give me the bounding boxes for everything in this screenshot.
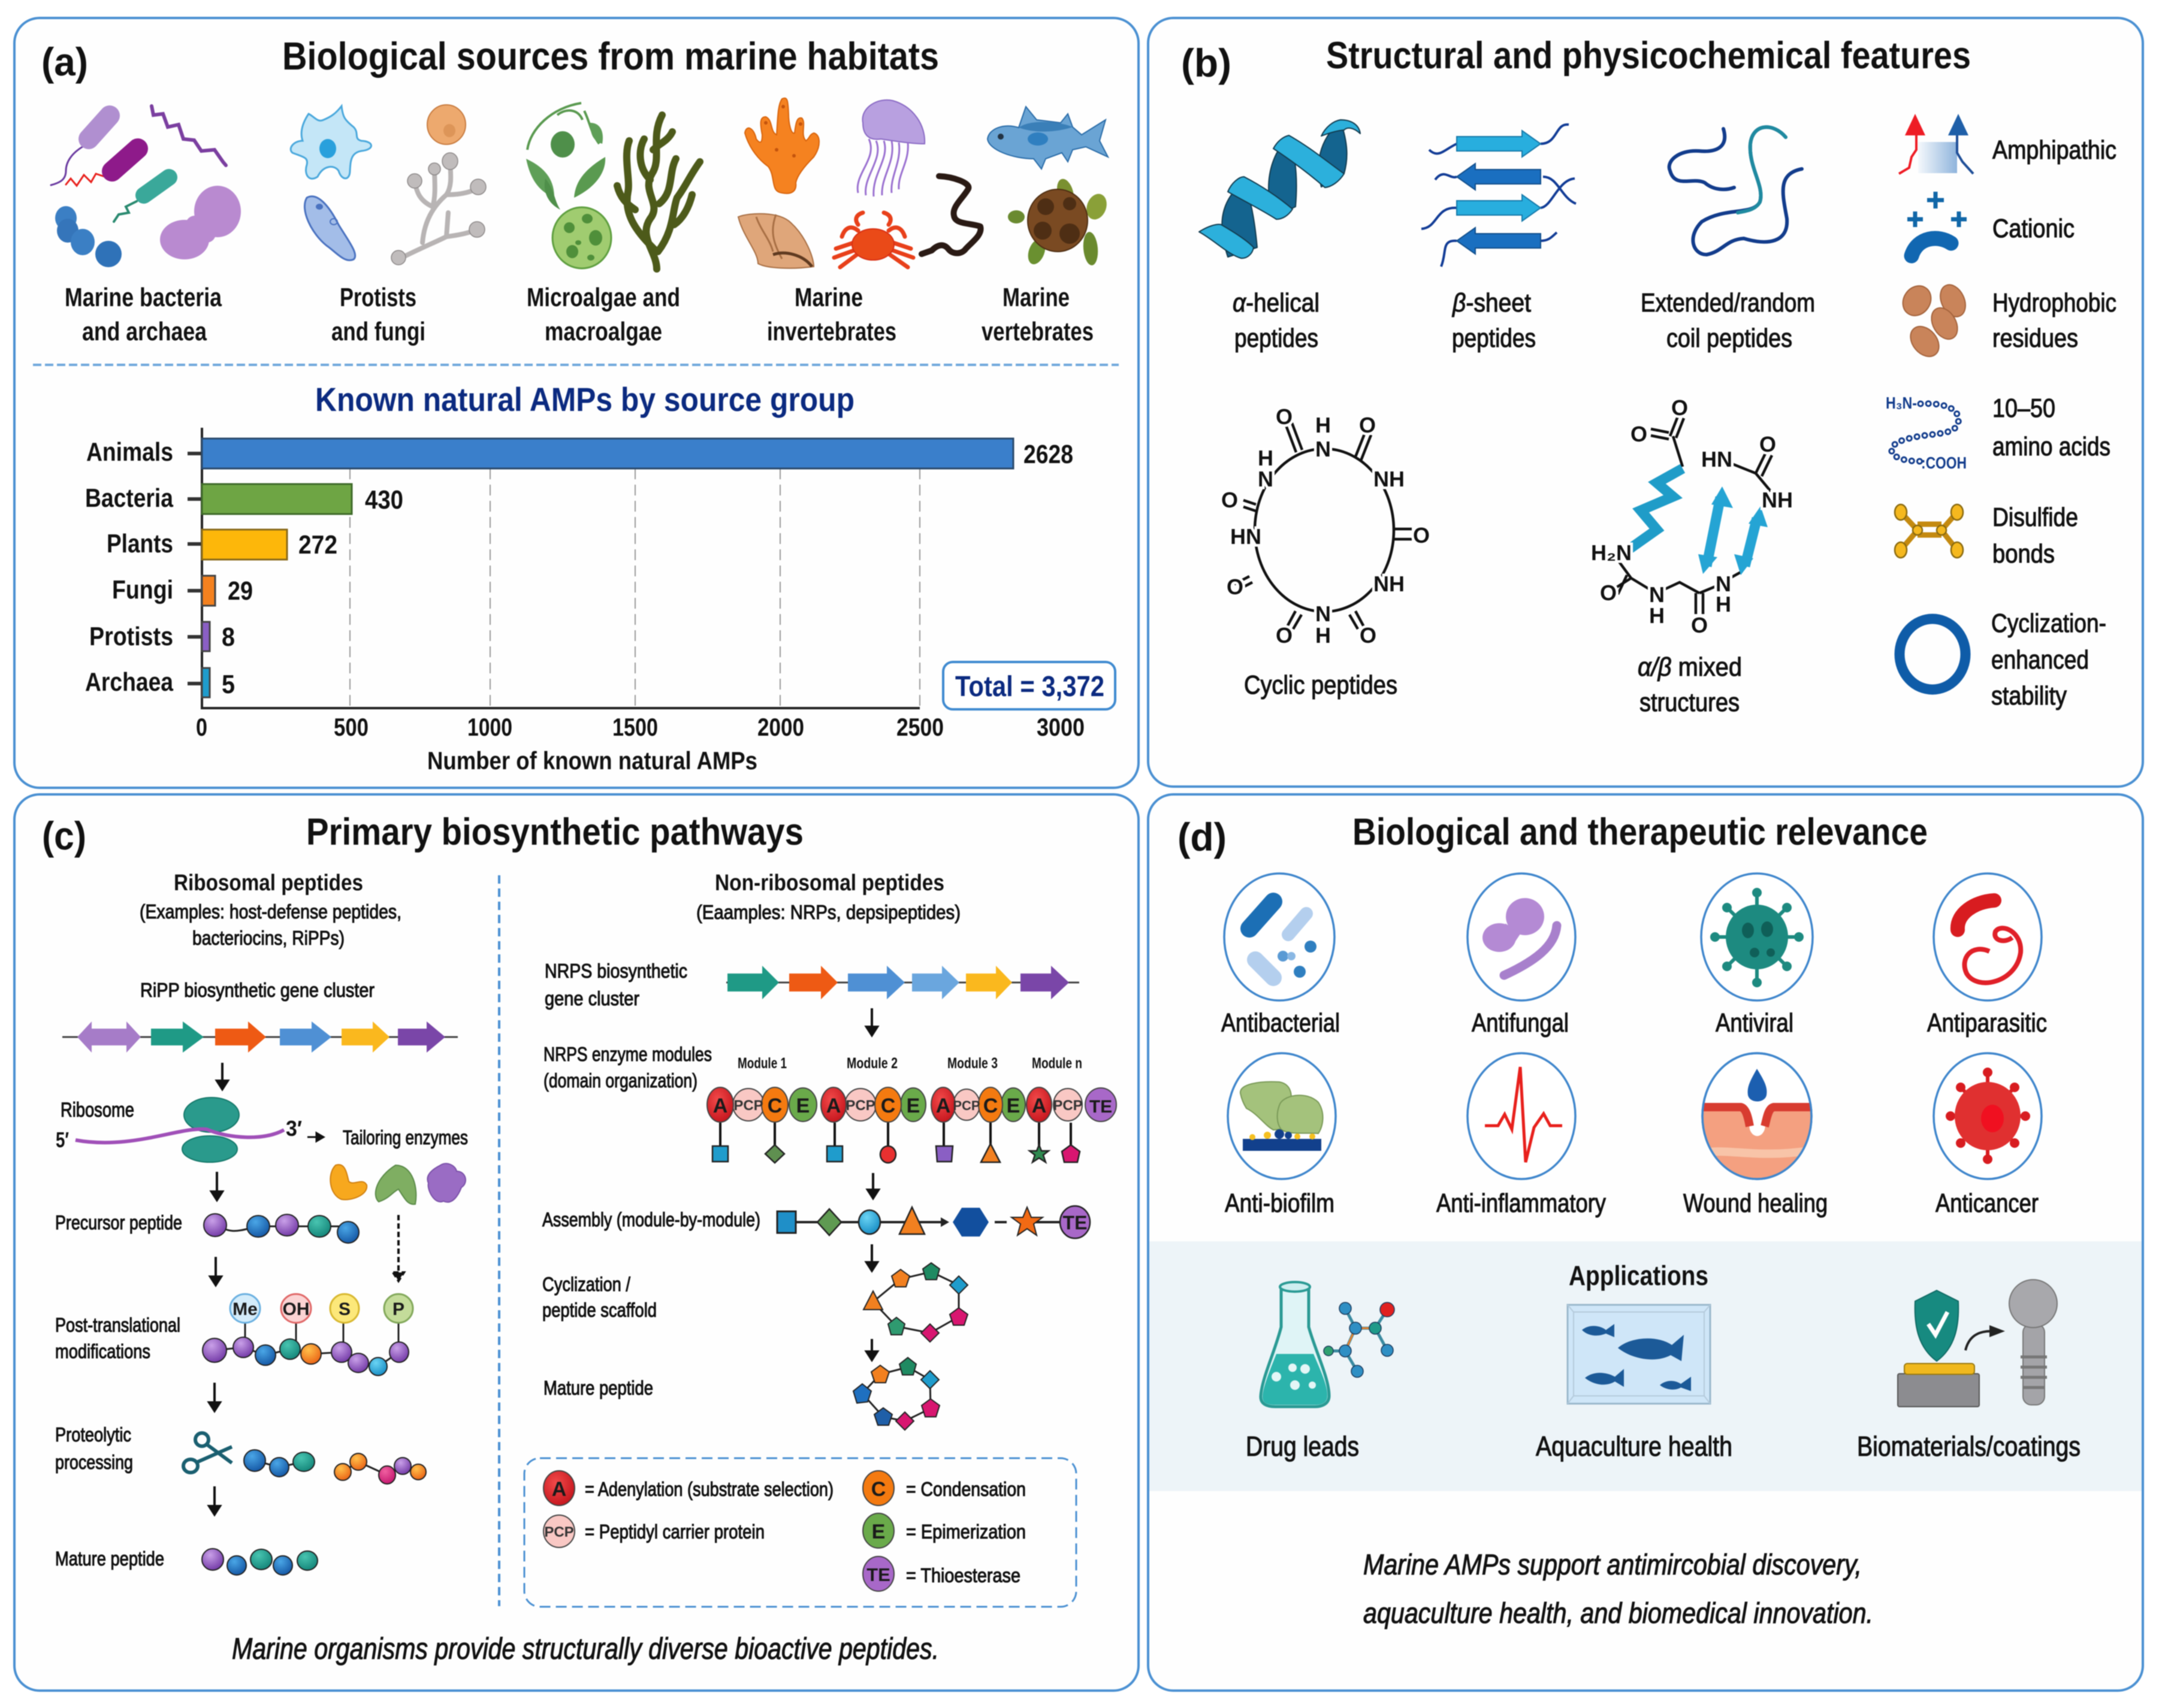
- label: cyclization: Cyclization /: [542, 1273, 631, 1295]
- category labels: Plants: [107, 529, 173, 558]
- label: protists and fungi: and fungi: [331, 317, 425, 346]
- badge: sulfur: [330, 1294, 359, 1323]
- label: extended random coil peptides: [1641, 288, 1815, 353]
- panel: primary biosynthetic pathways: [14, 794, 1139, 1691]
- NRPS domain chain: C: [768, 1095, 782, 1117]
- label: disulfide bonds: Disulfide: [1992, 503, 2078, 532]
- x axis tick labels: 0: [196, 713, 207, 741]
- label: microalgae and macroalgae: macroalgae: [545, 317, 662, 346]
- value labels: 2628: [1023, 440, 1073, 469]
- label: marine vertebrates: vertebrates: [982, 317, 1094, 346]
- badge: hydroxyl: OH: [283, 1299, 309, 1319]
- label: hydrophobic residues: [1992, 288, 2116, 353]
- label: 10-50 amino acids: [1992, 394, 2110, 461]
- x axis tick labels: 1000: [467, 713, 512, 741]
- arrow to tailoring enzymes: [307, 1133, 324, 1141]
- category labels: Animals: [86, 437, 173, 467]
- structure: alpha beta mixed: O: [1600, 581, 1617, 605]
- structure: cyclic peptide: O: [1221, 488, 1238, 512]
- legend: domain key: E: [872, 1520, 885, 1543]
- icon: peptide length chain: H₃N-: [1886, 394, 1917, 412]
- icon: cationic: [1907, 192, 1967, 256]
- module labels: [738, 1055, 1082, 1072]
- caption: panel d: [1363, 1549, 1873, 1630]
- label: anti-inflammatory: Anti-inflammatory: [1436, 1189, 1606, 1218]
- column heading: ribosomal peptides: Ribosomal peptides: [174, 870, 363, 896]
- structure: alpha beta mixed: H: [1649, 603, 1665, 628]
- column heading: ribosomal peptides: bacteriocins, RiPPs): [192, 927, 345, 949]
- label: tailoring enzymes: Tailoring enzymes: [343, 1126, 468, 1148]
- NRPS domain chain: A: [713, 1095, 727, 1117]
- icon: antifungal: [1467, 873, 1575, 1000]
- structure: alpha beta mixed: H₂N: [1591, 540, 1632, 565]
- icon: hydrophobic residues: [1897, 280, 1970, 362]
- bar: protists: [202, 622, 210, 651]
- label: biomaterials coatings: Biomaterials/coatings: [1857, 1431, 2081, 1462]
- icon: biomaterial coating: [1898, 1280, 2057, 1407]
- icon: peptide length chain: :COOH: [1921, 454, 1967, 472]
- label: marine bacteria and archaea: Marine bacteria: [65, 283, 222, 312]
- heading: biological and therapeutic relevance: Biological and therapeutic relevance: [1352, 811, 1928, 853]
- label: disulfide bonds: [1992, 503, 2078, 569]
- legend text: = Peptidyl carrier protein: [585, 1520, 765, 1543]
- label: alpha-helical peptides: peptides: [1234, 324, 1318, 353]
- structure: cyclic peptide: O: [1227, 575, 1243, 599]
- caption: panel d: Marine AMPs support antimircobial discovery,: [1363, 1549, 1862, 1581]
- modified peptide: [203, 1294, 413, 1376]
- icon group: marine vertebrates: [988, 107, 1110, 267]
- icon: aquaculture tank: [1568, 1305, 1710, 1404]
- column heading: non-ribosomal peptides: Non-ribosomal peptides: [715, 870, 944, 896]
- x axis tick labels: 2500: [896, 713, 944, 741]
- label: marine vertebrates: Marine: [1003, 283, 1070, 312]
- label: amphipathic: Amphipathic: [1992, 135, 2116, 165]
- legend text: = Thioesterase: [906, 1564, 1020, 1586]
- structure: cyclic peptide: HN: [1230, 524, 1261, 549]
- icon: antiparasitic: [1934, 873, 2042, 1000]
- gene cluster: NRPS: [726, 966, 1079, 999]
- label: alpha beta mixed structures: structures: [1639, 688, 1740, 717]
- structure: alpha beta mixed: H: [1716, 592, 1731, 616]
- label: post-translational modifications: [55, 1314, 180, 1362]
- label: cyclization: [542, 1273, 657, 1321]
- label: cyclization-enhanced stability: enhanced: [1991, 645, 2089, 675]
- category labels: Archaea: [85, 667, 173, 697]
- label: cyclization-enhanced stability: stability: [1991, 681, 2067, 711]
- value labels: 29: [228, 576, 253, 606]
- NRPS domain chain: E: [796, 1095, 810, 1117]
- NRPS domain chain: C: [983, 1095, 998, 1117]
- label: aquaculture health: Aquaculture health: [1536, 1431, 1732, 1462]
- label: antibacterial: Antibacterial: [1221, 1008, 1340, 1038]
- beads: mature peptide: [202, 1549, 318, 1575]
- icon group: marine invertebrates: [738, 98, 981, 268]
- icon: cyclization ring: [1900, 619, 1965, 690]
- label: NRPS gene cluster: NRPS biosynthetic: [545, 960, 687, 982]
- arrow: [209, 1486, 220, 1514]
- module labels: Module 3: [947, 1055, 998, 1072]
- beads: leader fragment: [334, 1453, 426, 1484]
- label: marine vertebrates: [982, 283, 1094, 346]
- NRPS domain chain: PCP: [846, 1098, 875, 1114]
- icon: anticancer: [1934, 1053, 2042, 1179]
- arrow: [866, 1339, 877, 1360]
- structure: cyclic peptide: H: [1315, 623, 1331, 648]
- label: alpha-helical peptides: α-helical: [1233, 288, 1319, 318]
- icon: beta sheet: [1421, 125, 1576, 267]
- label: wound healing: Wound healing: [1683, 1189, 1828, 1218]
- label: anticancer: Anticancer: [1935, 1189, 2039, 1218]
- NRPS domain chain: A: [826, 1095, 841, 1117]
- badge: phosphate: P: [392, 1299, 404, 1319]
- NRPS domain chain: E: [907, 1095, 920, 1117]
- label: beta-sheet peptides: [1451, 288, 1536, 353]
- structure: cyclic peptide: NH: [1373, 467, 1405, 491]
- label: NRPS enzyme modules: [543, 1043, 712, 1092]
- label: hydrophobic residues: Hydrophobic: [1992, 288, 2116, 318]
- label: cyclization: peptide scaffold: [542, 1299, 657, 1321]
- structure: alpha beta mixed: N: [1716, 572, 1731, 596]
- icon group: bacteria and archaea: [51, 106, 241, 267]
- legend: domain key: TE: [866, 1564, 890, 1585]
- badge: methyl: [230, 1294, 260, 1323]
- structure: alpha beta mixed: [1591, 395, 1793, 637]
- icon: antiviral: [1701, 873, 1813, 1000]
- category labels: Protists: [89, 622, 173, 651]
- label: precursor peptide: Precursor peptide: [55, 1211, 182, 1234]
- x axis tick labels: 1500: [612, 713, 658, 741]
- label: ribosome: Ribosome: [61, 1099, 134, 1121]
- bar: archaea: [202, 668, 210, 697]
- label: beta-sheet peptides: β-sheet: [1451, 288, 1531, 318]
- label: alpha-helical peptides: [1233, 288, 1319, 353]
- label: drug leads: Drug leads: [1246, 1431, 1359, 1462]
- structure: cyclic peptide: N: [1315, 601, 1331, 626]
- arrow: [868, 1173, 878, 1198]
- heading: applications: Applications: [1569, 1260, 1708, 1291]
- panel letter c: (c): [42, 814, 86, 858]
- label: 10-50 amino acids: 10–50: [1992, 394, 2055, 423]
- NRPS domain chain: [707, 1087, 1116, 1163]
- x axis tick labels: 3000: [1037, 713, 1085, 741]
- panel: biological sources: [14, 18, 1139, 788]
- NRPS domain chain: C: [881, 1095, 895, 1117]
- NRPS domain chain: PCP: [1053, 1098, 1083, 1114]
- arrow: [866, 1244, 877, 1271]
- caption: panel c: Marine organisms provide structurally diverse bioactive peptides.: [232, 1632, 939, 1665]
- NRPS domain chain: TE: [1089, 1097, 1112, 1117]
- label: proteolytic processing: processing: [55, 1451, 133, 1473]
- ribosome with mRNA: [76, 1098, 284, 1162]
- assembly chain: TE: [1063, 1212, 1087, 1234]
- label: marine bacteria and archaea: and archaea: [82, 317, 207, 346]
- column heading: ribosomal peptides: (Examples: host-defense peptides,: [140, 900, 401, 923]
- x axis tick labels: 500: [334, 713, 369, 741]
- structure: alpha beta mixed: O: [1691, 613, 1708, 637]
- value labels: 272: [298, 530, 337, 560]
- icon: disulfide bonds: [1895, 504, 1963, 558]
- badge: methyl: Me: [232, 1299, 258, 1319]
- structure: alpha beta mixed: O: [1671, 395, 1688, 420]
- structure: alpha beta mixed: N: [1649, 582, 1665, 607]
- label: marine invertebrates: Marine: [795, 283, 863, 312]
- icon: anti-inflammatory: [1467, 1053, 1575, 1179]
- structure: cyclic peptide: N: [1315, 437, 1331, 461]
- structure: alpha beta mixed: HN: [1701, 447, 1732, 471]
- panel: biological and therapeutic relevance: [1148, 794, 2143, 1691]
- badge: phosphate: [384, 1294, 413, 1323]
- dashed arrow: [393, 1215, 404, 1281]
- structure: cyclic peptide: O: [1276, 404, 1293, 429]
- label: proteolytic processing: Proteolytic: [55, 1423, 131, 1446]
- label: mature peptide: Mature peptide: [55, 1547, 164, 1570]
- caption: panel d: aquaculture health, and biomedical innovation.: [1363, 1598, 1873, 1630]
- icon: amphipathic: [1899, 114, 1973, 174]
- callout: total: Total = 3,372: [955, 671, 1104, 703]
- label: hydrophobic residues: residues: [1992, 324, 2078, 353]
- panel: structural and physicochemical features: [1148, 18, 2143, 787]
- badge: hydroxyl: [281, 1294, 311, 1323]
- NRPS domain chain: PCP: [953, 1098, 980, 1113]
- callout: total: [943, 662, 1115, 709]
- NRPS domain chain: A: [1032, 1095, 1046, 1117]
- icon: wound healing: [1702, 1053, 1812, 1180]
- structure: alpha beta mixed: NH: [1762, 488, 1793, 512]
- label: microalgae and macroalgae: Microalgae and: [527, 283, 680, 312]
- label: mature peptide NRP: Mature peptide: [543, 1377, 653, 1399]
- label: anti-biofilm: Anti-biofilm: [1225, 1189, 1334, 1218]
- badge: sulfur: S: [339, 1299, 351, 1319]
- bar: fungi: [202, 576, 215, 606]
- label: NRPS enzyme modules: NRPS enzyme modules: [543, 1043, 712, 1065]
- bar: bacteria: [202, 484, 352, 514]
- label: NRPS gene cluster: gene cluster: [545, 987, 639, 1009]
- icon: anti-biofilm: [1228, 1053, 1336, 1179]
- cyclized scaffold: [863, 1263, 968, 1342]
- icons: tailoring enzymes: [330, 1163, 466, 1204]
- label: cationic: Cationic: [1992, 214, 2075, 243]
- x axis tick labels: [196, 713, 1085, 741]
- label: protists and fungi: Protists: [340, 283, 416, 312]
- category labels: Fungi: [112, 575, 173, 604]
- value labels: 430: [365, 485, 403, 515]
- label: cyclization-enhanced stability: [1991, 609, 2106, 711]
- icon: antibacterial: [1224, 873, 1334, 1000]
- structure: cyclic peptide: O: [1413, 523, 1430, 548]
- bar: animals: [202, 439, 1013, 468]
- bar chart: known natural AMPs: [85, 428, 1115, 775]
- gene cluster: RiPP: [62, 1021, 458, 1053]
- NRPS domain chain: E: [1007, 1095, 1020, 1117]
- structure: cyclic peptide: O: [1276, 623, 1293, 648]
- heading: primary biosynthetic pathways: Primary biosynthetic pathways: [306, 811, 804, 853]
- x axis tick labels: 2000: [757, 713, 804, 741]
- assembly chain: [777, 1206, 1090, 1238]
- structure: cyclic peptide: [1221, 404, 1430, 648]
- label: antiparasitic: Antiparasitic: [1927, 1008, 2047, 1038]
- column heading: ribosomal peptides: [140, 870, 401, 949]
- label: alpha beta mixed structures: [1638, 652, 1742, 717]
- arrow: [217, 1063, 228, 1089]
- label: disulfide bonds: bonds: [1992, 539, 2055, 569]
- label: RiPP gene cluster: RiPP biosynthetic gene cluster: [140, 979, 375, 1001]
- label: protists and fungi: [331, 283, 425, 346]
- structure: alpha beta mixed: O: [1759, 432, 1776, 457]
- structure: cyclic peptide: H: [1258, 446, 1273, 470]
- NRPS domain chain: PCP: [733, 1098, 763, 1114]
- icon: random coil: [1669, 127, 1802, 255]
- band: applications: [1149, 1241, 2142, 1491]
- module labels: Module n: [1032, 1055, 1082, 1072]
- bar: plants: [202, 530, 287, 560]
- structure: alpha beta mixed: O: [1630, 422, 1647, 446]
- label: three prime: 3′: [286, 1116, 302, 1141]
- label: assembly: Assembly (module-by-module): [542, 1208, 760, 1231]
- chart heading: Known natural AMPs by source group: [315, 380, 854, 418]
- arrow: [209, 1383, 220, 1411]
- category labels: Bacteria: [85, 483, 173, 513]
- value labels: 5: [222, 670, 235, 699]
- legend: domain key: C: [871, 1478, 886, 1501]
- legend text: = Epimerization: [906, 1520, 1026, 1543]
- label: marine invertebrates: [767, 283, 896, 346]
- label: marine bacteria and archaea: [65, 283, 222, 346]
- structure: cyclic peptide: N: [1258, 467, 1273, 491]
- legend text: [585, 1478, 1026, 1586]
- category labels: [85, 437, 173, 697]
- structure: cyclic peptide: O: [1360, 623, 1376, 648]
- icon: peptide length chain: [1886, 394, 1967, 472]
- label: alpha beta mixed structures: α/β mixed: [1638, 652, 1742, 682]
- icon: alpha helix: [1199, 120, 1360, 258]
- legend: domain key: PCP: [544, 1524, 574, 1540]
- substrate shapes: [712, 1144, 1080, 1163]
- legend text: = Condensation: [906, 1478, 1026, 1500]
- icon: scissors: [183, 1433, 232, 1473]
- label: microalgae and macroalgae: [527, 283, 680, 346]
- label: 10-50 amino acids: amino acids: [1992, 432, 2110, 461]
- label: marine invertebrates: invertebrates: [767, 317, 896, 346]
- module labels: Module 1: [738, 1055, 787, 1072]
- label: NRPS gene cluster: [545, 960, 687, 1009]
- structure: cyclic peptide: H: [1315, 413, 1331, 437]
- beads: precursor peptide: [204, 1214, 359, 1243]
- label: extended random coil peptides: coil peptides: [1666, 324, 1792, 353]
- label: cyclic peptides: Cyclic peptides: [1244, 670, 1397, 700]
- icon group: protists and fungi: [291, 105, 486, 265]
- panel letter b: (b): [1181, 41, 1231, 85]
- label: post-translational modifications: Post-translational: [55, 1314, 180, 1336]
- module labels: Module 2: [847, 1055, 898, 1072]
- legend: domain key: A: [552, 1478, 566, 1501]
- column heading: non-ribosomal peptides: (Eaamples: NRPs, depsipeptides): [696, 901, 961, 923]
- label: post-translational modifications: modifications: [55, 1340, 150, 1362]
- icon: flask with molecule: [1261, 1282, 1394, 1407]
- column heading: non-ribosomal peptides: [696, 870, 961, 923]
- structure: cyclic peptide: NH: [1373, 572, 1405, 596]
- label: cyclization-enhanced stability: Cyclization-: [1991, 609, 2106, 638]
- label: proteolytic processing: [55, 1423, 133, 1473]
- label: antiviral: Antiviral: [1716, 1008, 1793, 1038]
- icon group: microalgae and macroalgae: [526, 103, 700, 269]
- NRPS domain chain: A: [936, 1095, 950, 1117]
- arrow: [212, 1172, 222, 1200]
- mature cyclic peptide: [853, 1358, 940, 1430]
- label: extended random coil peptides: Extended/random: [1641, 288, 1815, 318]
- legend: domain key: [524, 1458, 1076, 1607]
- label: beta-sheet peptides: peptides: [1452, 324, 1536, 353]
- arrow: [210, 1257, 221, 1285]
- panel letter a: (a): [41, 40, 88, 84]
- beads: cleaved peptide: [244, 1450, 315, 1477]
- legend text: = Adenylation (substrate selection): [585, 1478, 834, 1500]
- heading: biological sources: Biological sources from marine habitats: [282, 34, 939, 78]
- value labels: 8: [222, 622, 235, 652]
- label: five prime: 5′: [56, 1127, 69, 1152]
- arrow: [866, 1008, 877, 1035]
- structure: cyclic peptide: O: [1359, 413, 1376, 437]
- label: antifungal: Antifungal: [1472, 1008, 1569, 1038]
- x axis title: Number of known natural AMPs: [427, 746, 757, 775]
- value labels: [222, 440, 1073, 699]
- panel letter d: (d): [1177, 815, 1227, 859]
- heading: structural features: Structural and physicochemical features: [1326, 35, 1971, 77]
- label: NRPS enzyme modules: (domain organization): [543, 1069, 697, 1092]
